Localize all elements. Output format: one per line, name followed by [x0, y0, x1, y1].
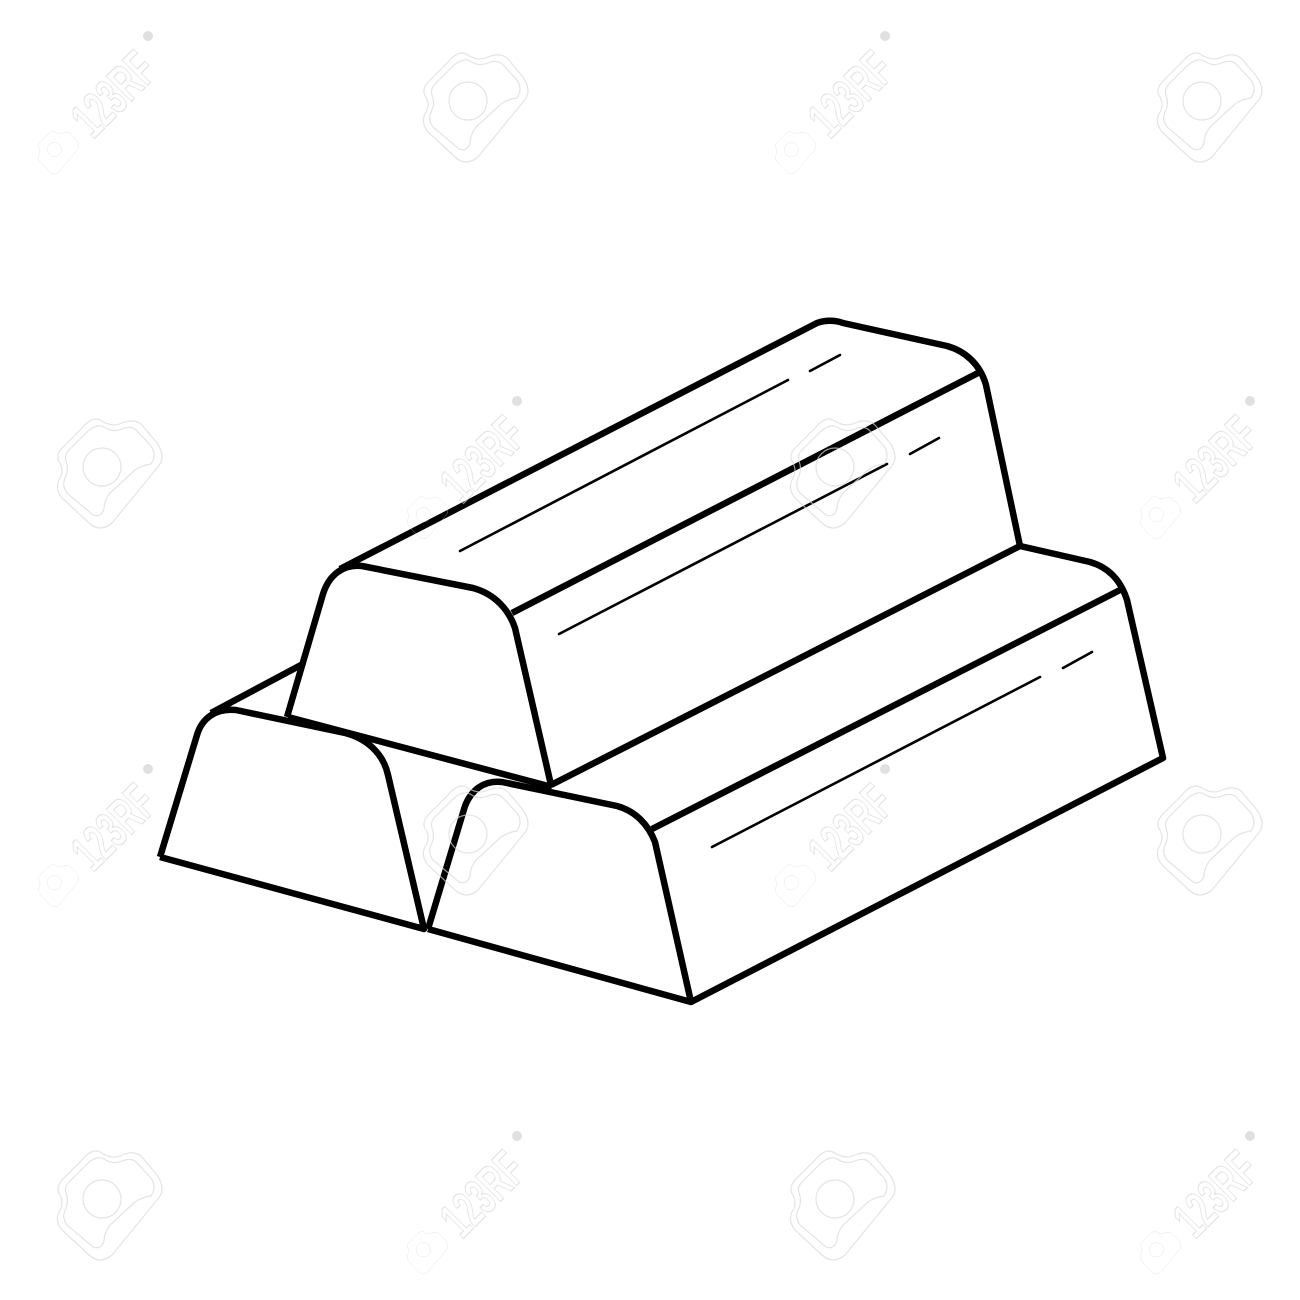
left lower bar [160, 665, 424, 929]
watermark: row 4 left egg [57, 1151, 162, 1260]
top bar highlights [460, 355, 939, 634]
watermark: row 4 middle egg [790, 1151, 895, 1260]
right lower bar [288, 546, 1163, 1002]
watermark: row 2 right logo [1140, 396, 1270, 539]
watermark: row 1 egg [423, 53, 528, 162]
gold bars [160, 321, 1163, 1002]
watermark: row 3 egg [423, 786, 528, 895]
watermark: row 2 middle egg [790, 419, 895, 528]
watermark: row 3 right logo: 123RF [797, 774, 905, 881]
right lower bar highlights [712, 652, 1092, 847]
watermark: row 3 right logo [775, 764, 905, 907]
watermark: row 1 right logo [775, 31, 905, 174]
watermark: row 1 right logo: 123RF [797, 41, 905, 148]
watermark: row 3 right egg [1157, 786, 1262, 895]
watermark: row 2 logo [407, 396, 537, 539]
watermark: row 3 left logo [38, 764, 168, 907]
watermark: row 4 logo: 123RF [429, 1141, 537, 1248]
watermark: row 1 right egg [1157, 53, 1262, 162]
watermark: row 4 logo [407, 1131, 537, 1274]
watermark: row 2 logo: 123RF [429, 406, 537, 513]
watermark: row 2 left egg [57, 419, 162, 528]
watermark: row 3 left logo: 123RF [60, 774, 168, 881]
top bar [287, 321, 1020, 785]
watermark: row 4 right logo [1140, 1131, 1270, 1274]
watermark: row 1 left logo [38, 31, 168, 174]
watermark: row 1 left logo: 123RF [60, 41, 168, 148]
